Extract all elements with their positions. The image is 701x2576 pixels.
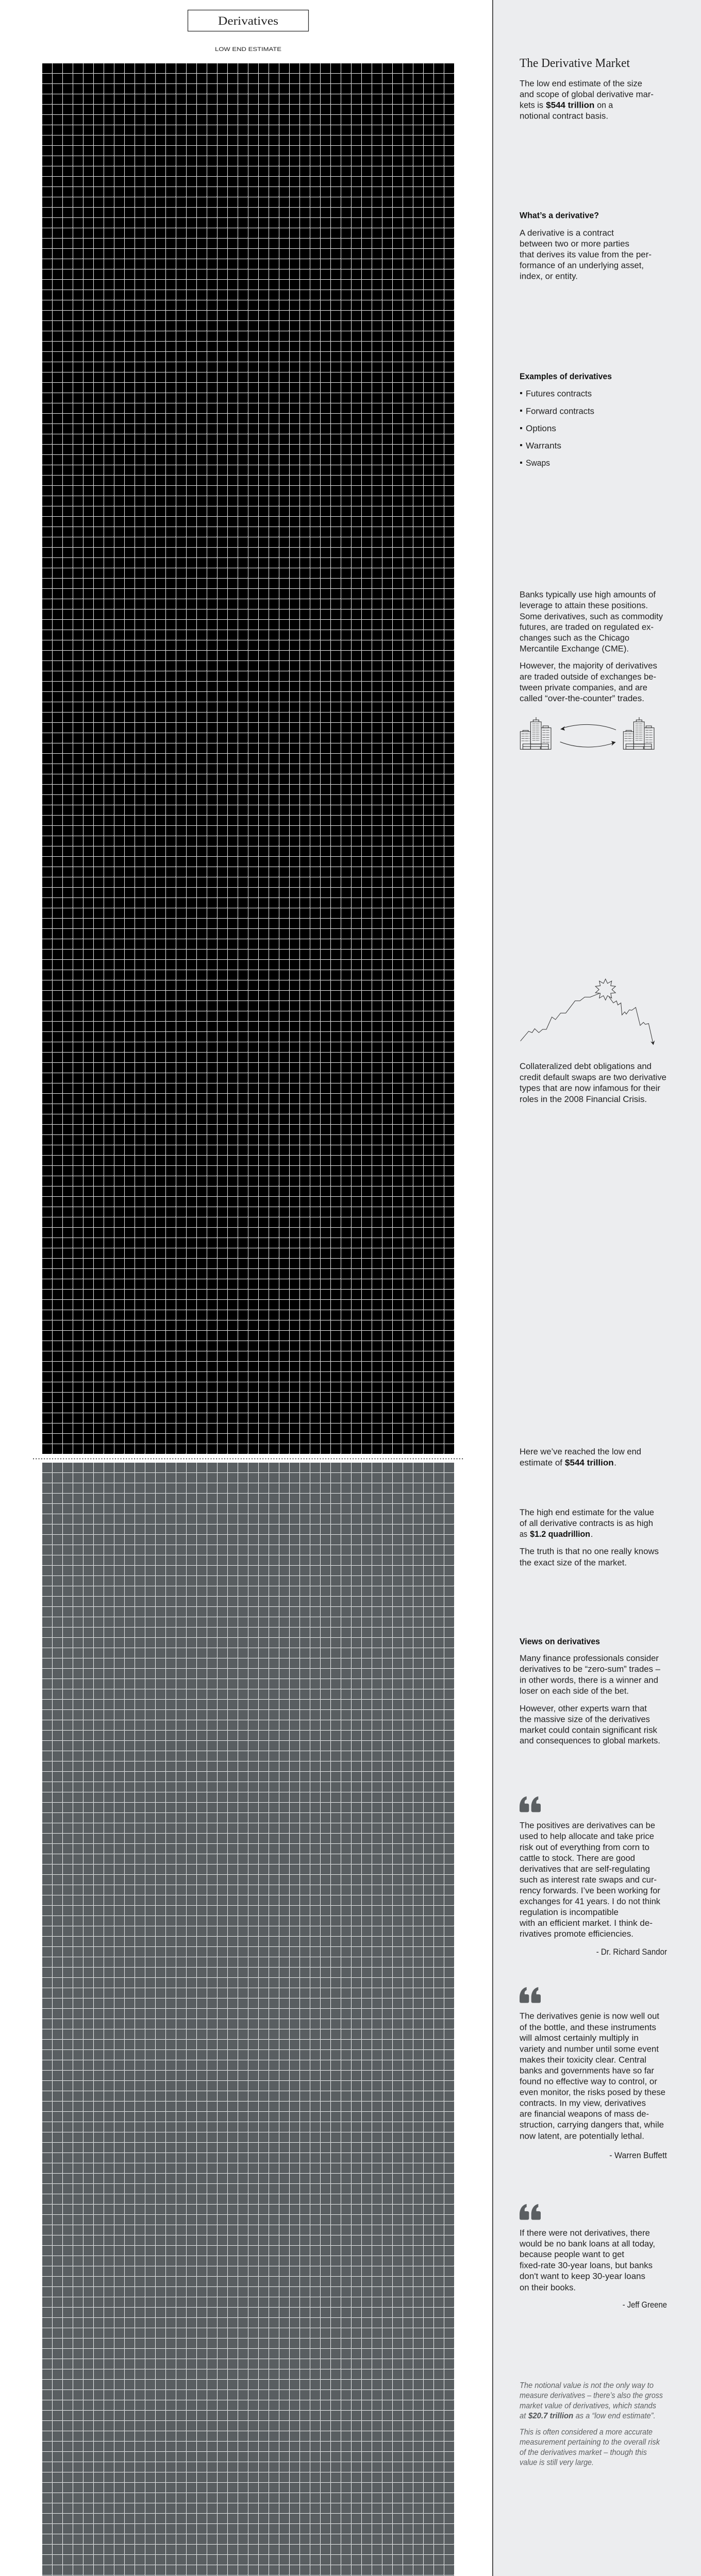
heading: examples of derivatives: Examples of derivatives [520, 371, 612, 381]
leverage text: Mercantile Exchange (CME). [520, 643, 629, 653]
quote: Warren Buffett: variety and number until some event [520, 2044, 659, 2054]
high end estimate text: as [520, 1529, 527, 1539]
quote: Dr. Richard Sandor: derivatives that are self-regulating [520, 1864, 650, 1874]
italic note: gross market value: value is still very large. [520, 2458, 594, 2467]
quote: Warren Buffett: now latent, are potentially lethal. [520, 2131, 644, 2141]
leverage text: futures, are traded on regulated ex- [520, 622, 654, 632]
low end reached text [520, 1447, 641, 1468]
views text: Many finance professionals consider [520, 1653, 659, 1663]
quote: Jeff Greene: because people want to get [520, 2249, 624, 2259]
quote: Jeff Greene: on their books. [520, 2282, 576, 2292]
high end estimate text [520, 1507, 659, 1568]
low end reached text: estimate of [520, 1458, 562, 1468]
quote: Warren Buffett: makes their toxicity clear. Central [520, 2055, 646, 2064]
quote: Warren Buffett: The derivatives genie is now well out [520, 2011, 659, 2021]
list of derivative examples: Futures contracts [526, 388, 592, 398]
high end estimate text: $1.2 quadrillion [530, 1529, 590, 1539]
views text: derivatives to be “zero-sum” trades – [520, 1664, 661, 1674]
definition text: that derives its value from the per- [520, 249, 652, 259]
italic note: gross market value [520, 2381, 663, 2467]
quote: Dr. Richard Sandor: rivatives promote efficiencies. [520, 1929, 633, 1939]
intro text [520, 78, 654, 121]
definition text [520, 228, 652, 281]
high end estimate text: The high end estimate for the value [520, 1507, 654, 1517]
definition text: index, or entity. [520, 271, 578, 281]
financial crisis text: types that are now infamous for their [520, 1083, 660, 1093]
icon: quotation mark 1 [520, 1797, 541, 1812]
italic note: gross market value: The notional value is not the only way to [520, 2381, 654, 2390]
low end reached text: $544 trillion [565, 1458, 614, 1468]
high end estimate text: The truth is that no one really knows [520, 1546, 659, 1556]
heading: what's a derivative: What’s a derivative? [520, 210, 599, 220]
leverage text: leverage to attain these positions. [520, 600, 648, 610]
italic note: gross market value: $20.7 trillion [528, 2412, 574, 2420]
italic note: gross market value: measurement pertaining to the overall risk [520, 2438, 660, 2447]
icon: two banks trading [520, 717, 654, 749]
quote: Jeff Greene [519, 2228, 667, 2310]
sidebar panel [492, 0, 701, 2576]
quote: Jeff Greene: fixed-rate 30-year loans, but banks [520, 2260, 653, 2270]
high end estimate text: . [591, 1529, 593, 1539]
intro text: kets is [520, 100, 543, 110]
high end estimate text: of all derivative contracts is as high [520, 1518, 653, 1528]
italic note: gross market value: of the derivatives market – though this [520, 2448, 647, 2457]
definition text: formance of an underlying asset, [520, 260, 644, 270]
icon: explosion burst [595, 979, 615, 1000]
grid: high end estimate grey squares [42, 1463, 454, 2576]
list of derivative examples: Swaps [526, 458, 550, 468]
views text: in other words, there is a winner and [520, 1675, 658, 1685]
quote: Warren Buffett: struction, carrying dangers that, while [520, 2120, 664, 2129]
dotted separator [33, 1458, 463, 1459]
grid: low end estimate black squares [42, 63, 454, 1454]
list of derivative examples: Warrants [526, 440, 561, 450]
italic note: gross market value: at [520, 2412, 526, 2420]
list of derivative examples: Forward contracts [526, 406, 594, 416]
financial crisis text: roles in the 2008 Financial Crisis. [520, 1094, 647, 1104]
views text: and consequences to global markets. [520, 1736, 660, 1745]
quote: Dr. Richard Sandor: risk out of everything from corn to [520, 1842, 649, 1852]
financial crisis text [520, 1061, 666, 1104]
high end estimate text: the exact size of the market. [520, 1558, 627, 1568]
low end reached text: . [614, 1458, 616, 1468]
quote: Warren Buffett: even monitor, the risks posed by these [520, 2088, 665, 2097]
icon: right bank building [623, 717, 654, 749]
page title box: Derivatives [218, 14, 278, 27]
intro text: and scope of global derivative mar- [520, 89, 654, 99]
quote: Warren Buffett [519, 2011, 667, 2160]
quote: Jeff Greene: don't want to keep 30-year loans [520, 2271, 645, 2281]
financial crisis text: Collateralized debt obligations and [520, 1061, 652, 1071]
definition text: A derivative is a contract [520, 228, 614, 238]
leverage text: are traded outside of exchanges be- [520, 672, 656, 682]
quote: Warren Buffett: found no effective way to control, or [520, 2076, 657, 2086]
quote: Dr. Richard Sandor: such as interest rate swaps and cur- [520, 1875, 657, 1885]
italic note: gross market value: market value of derivatives, which stands [520, 2401, 656, 2410]
intro text: on a [597, 100, 613, 110]
arrow: left to right [560, 741, 616, 747]
intro text: notional contract basis. [520, 111, 608, 121]
low end estimate label: LOW END ESTIMATE [215, 46, 281, 53]
quote: Warren Buffett: of the bottle, and these instruments [520, 2022, 656, 2032]
leverage text: called “over-the-counter” trades. [520, 693, 644, 703]
quote: Jeff Greene: If there were not derivatives, there [520, 2228, 650, 2238]
quote: Dr. Richard Sandor: cattle to stock. There are good [520, 1853, 635, 1863]
quote: Warren Buffett: are financial weapons of mass de- [520, 2109, 649, 2119]
icon: quotation mark 2 [520, 1987, 541, 2003]
quote: Dr. Richard Sandor: exchanges for 41 years. I do not think [520, 1896, 660, 1906]
leverage text [520, 589, 663, 703]
quote: Jeff Greene: - Jeff Greene [623, 2300, 667, 2310]
heading: views on derivatives: Views on derivatives [520, 1636, 600, 1646]
arrow: right to left [560, 724, 616, 731]
icon: quotation mark 3 [520, 2204, 541, 2220]
icon: left bank building [520, 717, 551, 749]
italic note: gross market value: measure derivatives – there’s also the gross [520, 2391, 663, 2400]
quote: Warren Buffett: - Warren Buffett [609, 2150, 667, 2160]
quote: Dr. Richard Sandor [519, 1820, 667, 1957]
quote: Dr. Richard Sandor: used to help allocate and take price [520, 1831, 654, 1841]
quote: Dr. Richard Sandor: with an efficient market. I think de- [519, 1918, 653, 1928]
leverage text: Banks typically use high amounts of [520, 589, 656, 599]
quote: Warren Buffett: contracts. In my view, derivatives [520, 2098, 646, 2108]
list of derivative examples: Options [526, 423, 556, 433]
heading: The Derivative Market: The Derivative Market [520, 57, 630, 70]
quote: Warren Buffett: will almost certainly multiply in [519, 2033, 639, 2043]
italic note: gross market value: as a “low end estimate”. [576, 2412, 656, 2420]
definition text: between two or more parties [520, 239, 629, 248]
views text: loser on each side of the bet. [520, 1686, 629, 1696]
leverage text: tween private companies, and are [520, 683, 647, 692]
quote: Jeff Greene: would be no bank loans at all today, [519, 2239, 655, 2248]
italic note: gross market value: This is often considered a more accurate [520, 2428, 653, 2437]
quote: Dr. Richard Sandor: The positives are derivatives can be [520, 1820, 655, 1830]
list of derivative examples [520, 388, 594, 468]
financial crisis text: credit default swaps are two derivative [520, 1072, 666, 1082]
quote: Warren Buffett: banks and governments have so far [520, 2066, 654, 2075]
quote: Dr. Richard Sandor: - Dr. Richard Sandor [596, 1947, 667, 1957]
leverage text: Some derivatives, such as commodity [520, 612, 663, 621]
quote: Dr. Richard Sandor: rency forwards. I’ve been working for [520, 1886, 660, 1895]
views text: market could contain significant risk [520, 1725, 657, 1735]
page title box [188, 10, 308, 31]
quote: Dr. Richard Sandor: regulation is incompatible [520, 1907, 619, 1917]
intro text: $544 trillion [546, 100, 594, 110]
chart: market rise and crash line [521, 979, 655, 1045]
low end reached text: Here we’ve reached the low end [520, 1447, 641, 1456]
leverage text: However, the majority of derivatives [520, 661, 657, 671]
intro text: The low end estimate of the size [520, 78, 642, 88]
views text [520, 1653, 661, 1745]
views text: However, other experts warn that [520, 1703, 647, 1713]
leverage text: changes such as the Chicago [520, 633, 629, 642]
views text: the massive size of the derivatives [520, 1714, 650, 1724]
